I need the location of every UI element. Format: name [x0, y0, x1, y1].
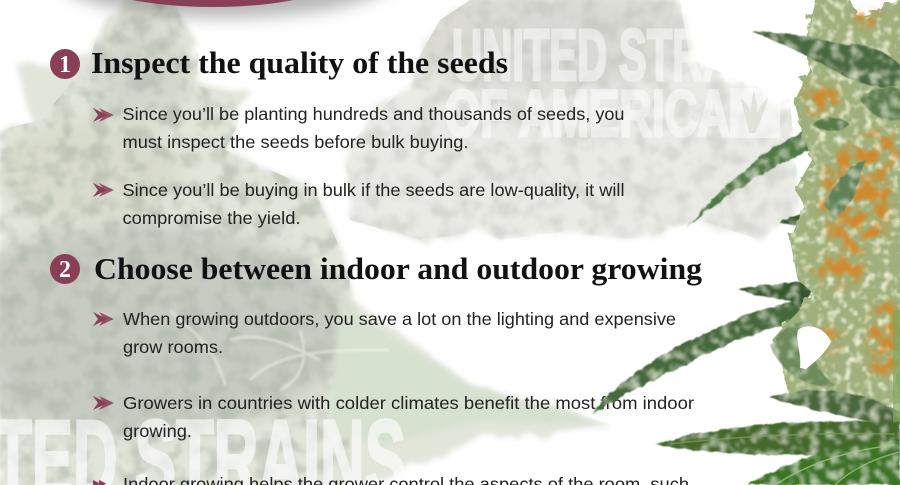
bullet arrow [93, 183, 114, 197]
heading 2: Choose between indoor and outdoor growing [94, 251, 703, 286]
stem [893, 310, 900, 425]
number badge 2 [50, 254, 80, 284]
bullet text: growing. [123, 421, 192, 441]
bullet text: Growers in countries with colder climates benefit the most from indoor [123, 393, 694, 413]
background watermark: faded bud right [345, 0, 800, 240]
number badge 1 [50, 49, 80, 79]
bullet arrow [93, 396, 114, 410]
orange pistils [802, 10, 900, 380]
number badge 2: 2 [59, 257, 71, 283]
bullet text: must inspect the seeds before bulk buying. [122, 132, 468, 152]
watermark icon: leaf in box [741, 90, 768, 133]
bullet text [122, 104, 624, 152]
watermark lettering: united strains of america [445, 16, 802, 150]
thin leaves behind the flower [592, 125, 825, 415]
bullet arrow [93, 108, 114, 122]
bullet text: Since you’ll be buying in bulk if the seeds are low-quality, it will [122, 180, 624, 200]
gap in flower [797, 326, 831, 369]
flower body [772, 0, 900, 410]
bullet text: When growing outdoors, you save a lot on the lighting and expensive [123, 309, 676, 329]
large lower leaves [655, 421, 900, 485]
bullet text: grow rooms. [123, 337, 223, 357]
bullet text [123, 393, 694, 441]
bullet arrow [93, 312, 114, 326]
photo: cannabis plant on right edge [592, 0, 900, 485]
bullet text: Since you’ll be planting hundreds and thousands of seeds, you [122, 104, 624, 124]
number badge 1: 1 [59, 52, 71, 78]
bullet arrow [93, 480, 106, 485]
top banner arc with shadow [55, 0, 395, 18]
section 1 [50, 45, 624, 228]
leaf veins [670, 433, 900, 485]
bullet text [123, 309, 676, 357]
dark upper leaf [752, 32, 900, 87]
bullet text [122, 180, 624, 228]
bullet text: compromise the yield. [122, 208, 300, 228]
heading 1: Inspect the quality of the seeds [91, 45, 508, 80]
watermark lettering: united strains of america: OF AMERICA [445, 76, 730, 150]
small side leaves [770, 87, 900, 428]
section 2 [50, 251, 703, 485]
